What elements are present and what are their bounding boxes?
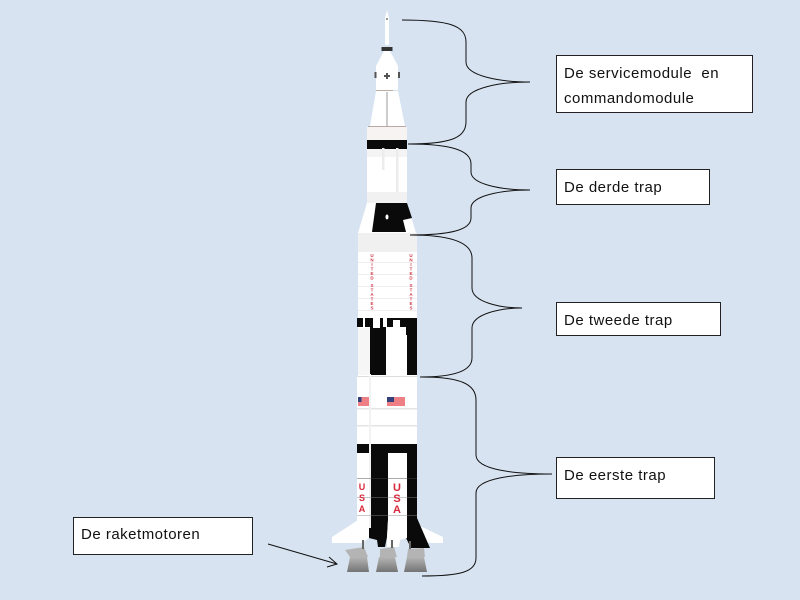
label: service and command module [556, 55, 753, 113]
bracket: third stage [408, 144, 530, 235]
flag small [358, 397, 369, 406]
label: UNITED STATES right: E [409, 271, 413, 276]
label: UNITED STATES left: E [370, 301, 374, 306]
bracket: service and command module [402, 20, 530, 144]
label: first stage: De eerste trap [564, 467, 666, 484]
label: USA left: A [359, 504, 366, 514]
bracket: second stage [410, 235, 522, 377]
label: first stage [556, 457, 715, 499]
label: UNITED STATES left: S [370, 283, 374, 288]
label: UNITED STATES right: T [410, 266, 413, 272]
label: UNITED STATES right: I [410, 262, 412, 267]
label: UNITED STATES left: N [370, 258, 374, 262]
label: UNITED STATES left: I [371, 262, 373, 267]
bracket: first stage [422, 377, 552, 576]
label: UNITED STATES right: S [409, 306, 413, 310]
label: UNITED STATES right: A [409, 292, 413, 297]
label: UNITED STATES right: S [409, 283, 413, 288]
label: third stage: De derde trap [564, 179, 662, 196]
label: UNITED STATES left: T [371, 296, 374, 302]
label: USA right: S [393, 493, 401, 505]
label: UNITED STATES left: D [370, 276, 374, 280]
label: UNITED STATES left: T [371, 266, 374, 272]
label: UNITED STATES left: S [370, 306, 374, 310]
label: UNITED STATES right: T [410, 288, 413, 292]
label: rocket engines: De raketmotoren [81, 526, 200, 543]
rocket engines [345, 540, 427, 572]
rocket [332, 10, 443, 572]
label: rocket engines [73, 517, 253, 555]
label: UNITED STATES left: U [370, 253, 374, 258]
label: UNITED STATES right: E [409, 301, 413, 306]
label: UNITED STATES right: U [409, 253, 413, 258]
second stage [357, 233, 417, 376]
escape tower [382, 10, 392, 51]
label: third stage [556, 169, 710, 205]
label: USA right: A [393, 504, 401, 516]
arrow to engines [268, 544, 337, 567]
first stage [332, 376, 443, 548]
fin right [420, 526, 443, 543]
label: UNITED STATES left: T [371, 288, 374, 292]
label: USA left: U [359, 482, 365, 492]
label: UNITED STATES left: A [370, 292, 374, 297]
service module [367, 91, 407, 140]
label: UNITED STATES right: N [409, 258, 413, 262]
command module [374, 51, 400, 92]
label: USA left: S [359, 493, 365, 503]
fin left [332, 520, 358, 543]
third stage [358, 140, 416, 233]
label: second stage [556, 302, 721, 336]
label: service and command module: De servicemodule en commandomodule [564, 65, 719, 107]
label: USA right: U [393, 482, 401, 494]
flag large [387, 397, 405, 406]
label: UNITED STATES left: E [370, 271, 374, 276]
label: second stage: De tweede trap [564, 312, 673, 329]
label: UNITED STATES right: D [409, 276, 413, 280]
label: UNITED STATES right: T [410, 296, 413, 302]
